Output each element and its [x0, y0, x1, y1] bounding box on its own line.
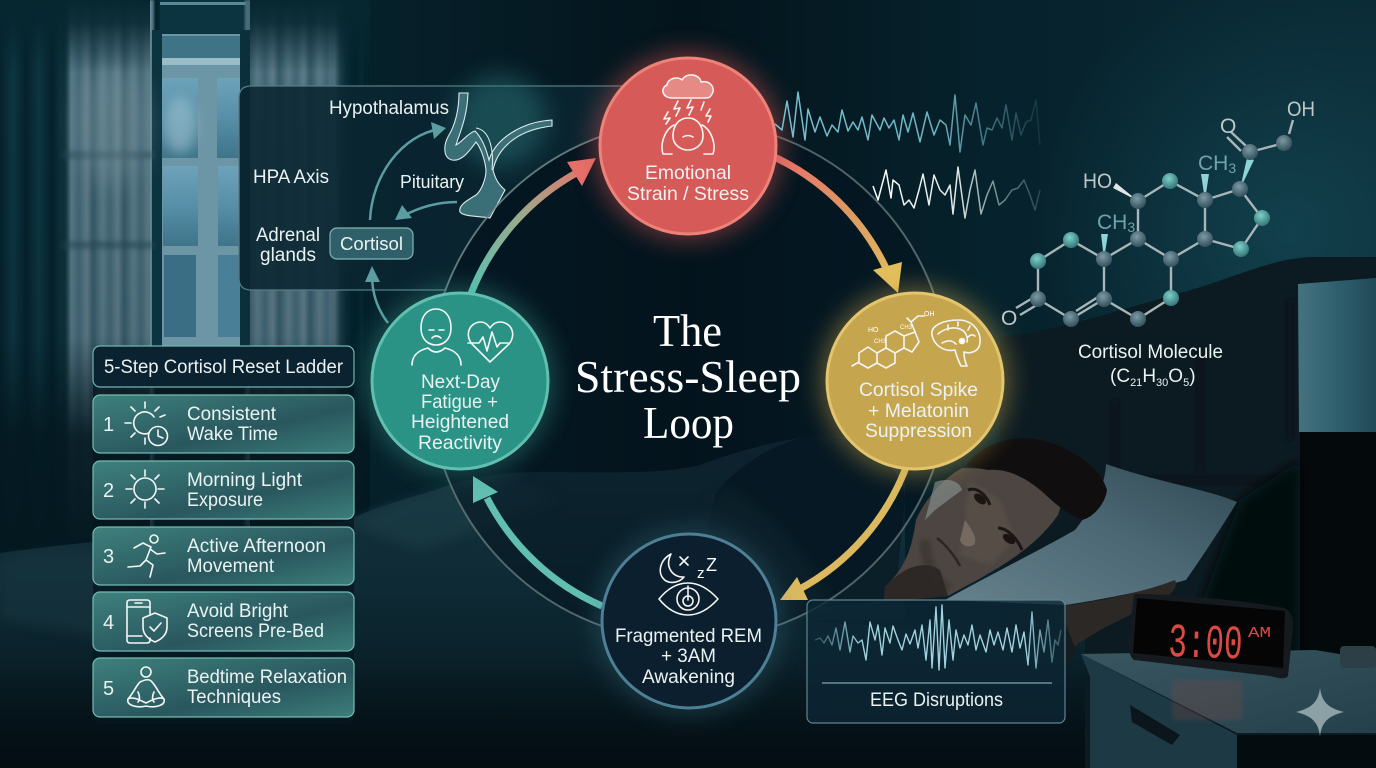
- icon: mini cortisol molecule: HO: [868, 327, 879, 334]
- man's shirt and arm: [686, 435, 905, 620]
- atom labels: CH: [1097, 211, 1127, 234]
- headboard: [1000, 257, 1376, 768]
- step 2: [93, 461, 354, 519]
- loop interior tint: [429, 121, 949, 641]
- molecule caption: Cortisol Molecule: [1078, 342, 1223, 363]
- icon: mini cortisol molecule: OH: [924, 311, 934, 318]
- lamp: [1298, 278, 1376, 432]
- atom labels: O: [1001, 307, 1017, 330]
- alarm clock: AM: [1248, 625, 1271, 642]
- step text: Bedtime Relaxation: [187, 667, 347, 688]
- arrow: stress to cortisol: [770, 155, 902, 293]
- icon: mini cortisol molecule: [852, 311, 934, 368]
- atom labels: 3: [1228, 160, 1236, 176]
- alarm clock: [1129, 594, 1293, 678]
- step text: Consistent: [187, 404, 277, 425]
- label: Adrenal glands: Adrenal: [256, 225, 320, 246]
- step text: Screens Pre-Bed: [187, 621, 324, 642]
- molecule formula: O: [1168, 366, 1183, 387]
- brainwave traces, top right: [775, 92, 1040, 218]
- icon: meditating figure: [128, 667, 164, 707]
- molecule formula: H: [1142, 366, 1156, 387]
- step 2: 2: [103, 480, 114, 502]
- label: Hypothalamus: Hypothalamus: [329, 98, 449, 119]
- loop ring: [429, 121, 949, 641]
- alarm clock: 3:00: [1167, 617, 1243, 674]
- molecule formula: ): [1189, 366, 1196, 387]
- title: Loop: [643, 397, 734, 448]
- arm under pillow: [1062, 580, 1176, 650]
- molecule formula: 21: [1130, 377, 1142, 389]
- step 1: [93, 395, 354, 453]
- step 5: [93, 658, 354, 717]
- label: Adrenal glands: glands: [260, 245, 316, 266]
- icon: brain: [932, 320, 980, 366]
- icon: moon, z's and eye: [659, 554, 718, 615]
- atom labels: CH: [1198, 152, 1228, 175]
- atom labels: HO: [1083, 170, 1112, 193]
- title: Stress-Sleep: [575, 351, 801, 402]
- step text: Morning Light: [187, 470, 303, 491]
- label: Cortisol box: [330, 228, 413, 259]
- molecule formula: 5: [1183, 377, 1189, 389]
- icon: mini cortisol molecule: CH3: [874, 339, 887, 345]
- nightstand: [1081, 646, 1376, 768]
- bonds: [1016, 120, 1293, 319]
- step 1: 1: [103, 414, 114, 436]
- node label: Reactivity: [418, 432, 502, 454]
- step 3: [93, 527, 354, 585]
- atom labels: 3: [1127, 219, 1135, 235]
- atom labels: [1001, 98, 1315, 330]
- molecule formula: 30: [1156, 377, 1168, 389]
- EEG panel: [807, 600, 1065, 723]
- blanket: [0, 436, 1085, 768]
- step text: Exposure: [187, 490, 263, 511]
- HPA arrows: [365, 122, 457, 323]
- atom labels: OH: [1287, 98, 1315, 121]
- icon: sun with clock: [125, 402, 168, 446]
- step text: Wake Time: [187, 424, 278, 445]
- molecule formula: (C: [1110, 366, 1130, 387]
- node label: Suppression: [865, 420, 972, 442]
- node label: + 3AM: [661, 645, 716, 667]
- icon: mini cortisol molecule: CH3: [900, 325, 913, 331]
- step 4: [93, 592, 354, 651]
- node label: Emotional: [645, 162, 731, 184]
- icon: storm cloud over stressed head: [662, 75, 714, 154]
- node label: Cortisol Spike: [859, 379, 978, 401]
- arrow: cortisol to fragmented REM: [780, 462, 908, 600]
- node label: Awakening: [642, 666, 735, 688]
- title: [575, 305, 801, 448]
- icon: moon, z's and eye: z: [697, 565, 704, 582]
- hypothalamus and pituitary illustration: [445, 93, 552, 218]
- node label: Fatigue +: [421, 391, 498, 413]
- step 5: 5: [103, 678, 114, 700]
- cortisol molecule: [1001, 98, 1315, 389]
- node: next-day fatigue: [365, 286, 555, 476]
- node label: Next-Day: [421, 371, 500, 393]
- sparkle watermark: [1296, 688, 1344, 736]
- window: [150, 0, 250, 348]
- node: cortisol spike: [820, 286, 1010, 476]
- atom labels: O: [1220, 115, 1236, 138]
- node: emotional strain: [593, 51, 783, 241]
- node: fragmented REM: [594, 526, 784, 716]
- EEG wave: [815, 605, 1061, 670]
- node label: Fragmented REM: [615, 625, 762, 647]
- icon: runner: [128, 535, 165, 577]
- node label: + Melatonin: [868, 400, 969, 422]
- label: Cortisol box: Cortisol: [340, 234, 403, 254]
- label: HPA Axis: HPA Axis: [253, 167, 329, 188]
- curtains: [0, 0, 370, 560]
- title: The: [653, 305, 722, 356]
- icon: moon, z's and eye: Z: [706, 555, 717, 575]
- step 4: 4: [103, 612, 114, 634]
- arrow: fatigue to stress: [470, 158, 596, 296]
- node label: Heightened: [411, 411, 509, 433]
- stereo wedges: [1101, 158, 1254, 259]
- HPA axis panel: [239, 74, 640, 323]
- step 3: 3: [103, 546, 114, 568]
- ladder heading: 5-Step Cortisol Reset Ladder: [104, 357, 344, 378]
- icon: heart with pulse: [468, 322, 513, 362]
- icon: tired person: [412, 309, 461, 365]
- EEG caption: EEG Disruptions: [870, 690, 1003, 711]
- icon: phone and shield: [127, 600, 167, 643]
- step text: Active Afternoon: [187, 536, 326, 557]
- node label: Strain / Stress: [627, 183, 749, 205]
- label: Pituitary: Pituitary: [400, 172, 464, 192]
- step text: Movement: [187, 556, 275, 577]
- atoms: [1030, 173, 1270, 306]
- icon: sun: [126, 470, 164, 508]
- man's hair: [966, 438, 1107, 520]
- panel: 5-step cortisol reset ladder: [93, 346, 354, 724]
- man's face: [884, 468, 1066, 602]
- step text: Avoid Bright: [187, 601, 289, 622]
- arrow: REM to fatigue: [473, 476, 602, 606]
- step text: Techniques: [187, 687, 281, 708]
- ladder heading: [93, 346, 354, 387]
- pillow: [945, 464, 1237, 605]
